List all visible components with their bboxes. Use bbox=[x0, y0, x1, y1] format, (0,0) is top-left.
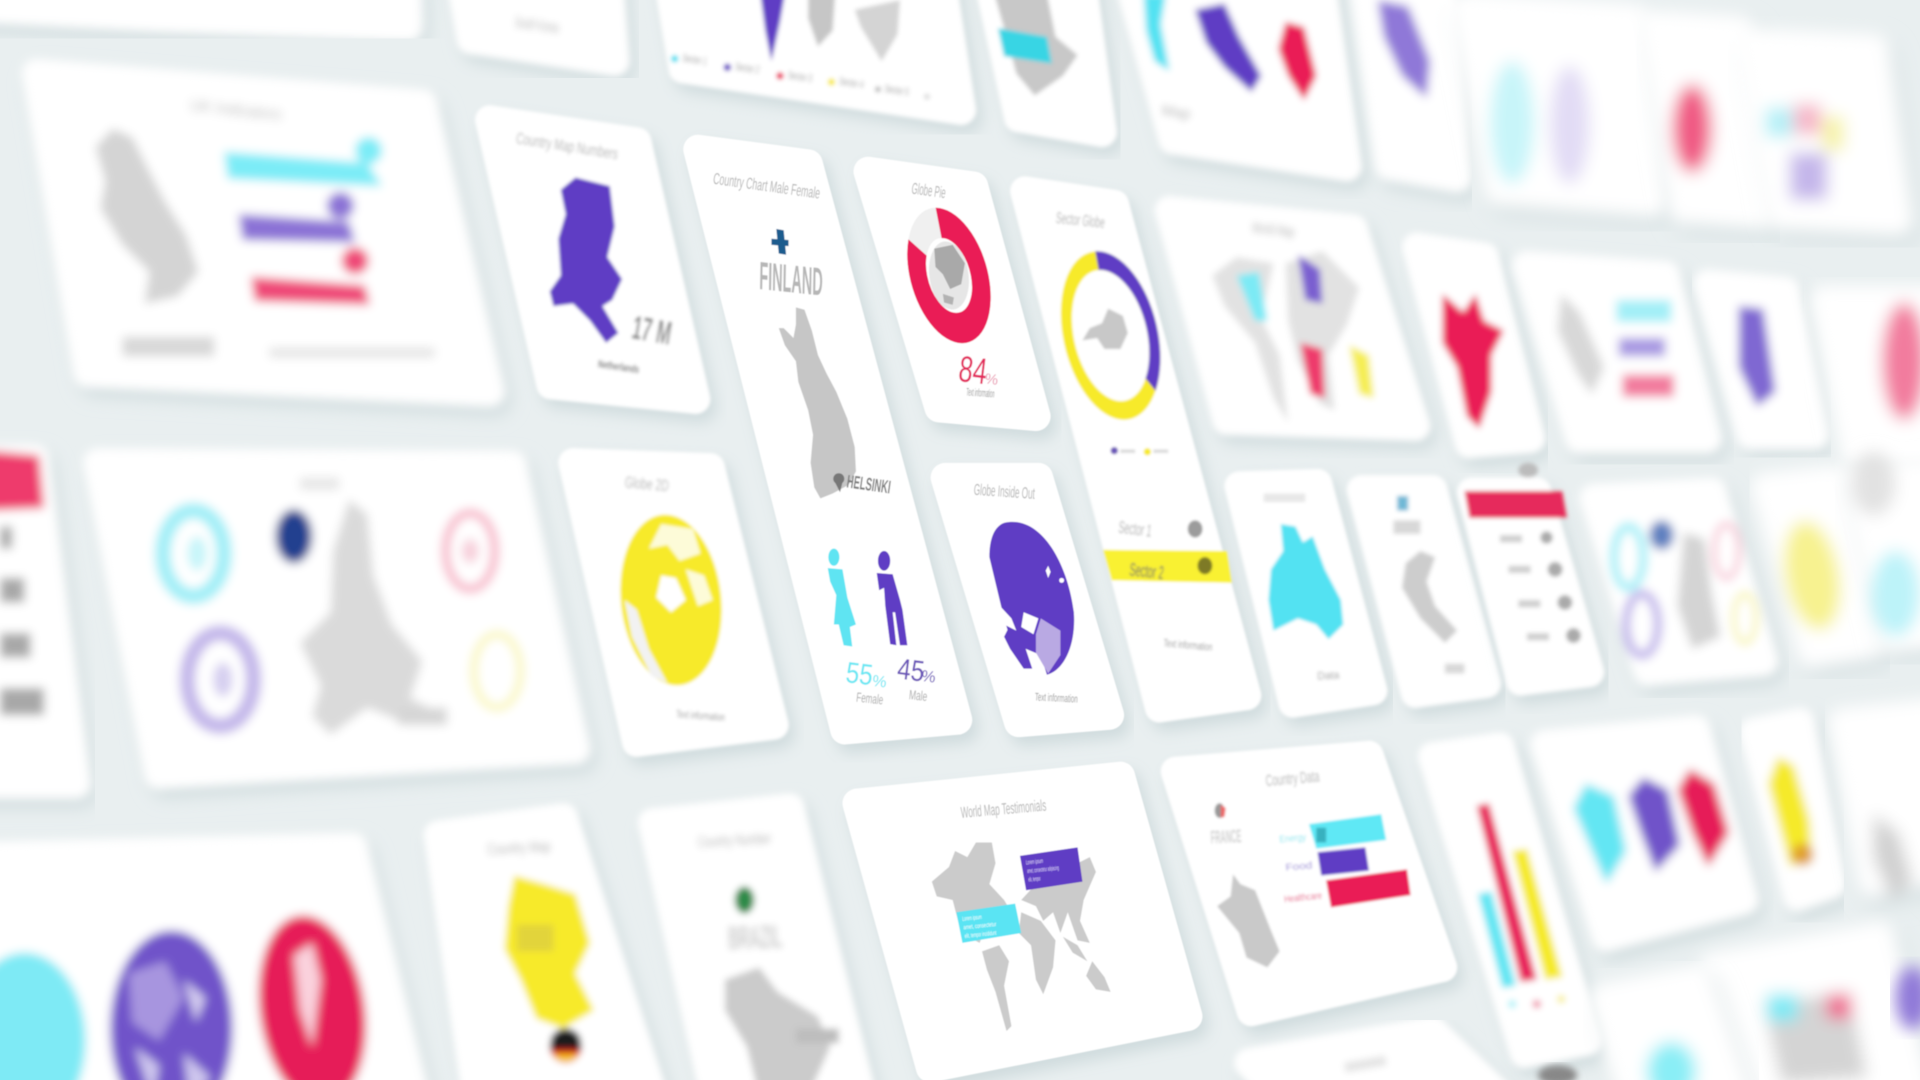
icon: purple globe fragment bbox=[760, 0, 785, 61]
row: red bar bbox=[1284, 869, 1411, 907]
region: cyan bbox=[1237, 272, 1267, 321]
panel: far right red card bbox=[1824, 300, 1920, 453]
panel: UK chart bbox=[37, 73, 490, 392]
map: France bbox=[1217, 874, 1280, 967]
icon: Finland flag cross bbox=[771, 229, 789, 255]
panel: top row purple map card bbox=[1359, 0, 1457, 178]
panel: yellow map right bbox=[1753, 722, 1832, 896]
icon: flag circle bbox=[550, 1029, 582, 1063]
chart: two sector ring bbox=[1054, 258, 1167, 413]
row: Sector 1: Sector 1 bbox=[1117, 517, 1153, 541]
icon: female figure bbox=[828, 549, 856, 647]
stat: 45%: 45 bbox=[895, 653, 926, 689]
icon: grey map fragment right bbox=[855, 0, 900, 61]
map: red country bbox=[1278, 22, 1316, 100]
row: Sector 1 bbox=[1117, 517, 1202, 541]
chart: rings bbox=[1614, 520, 1756, 655]
callout: cyan testimonial: Lorem ipsum bbox=[962, 914, 982, 923]
heading: World Map bbox=[1251, 220, 1295, 241]
icon: male figure bbox=[877, 551, 907, 645]
label: Netherlands bbox=[597, 358, 640, 376]
panel: Netherlands map bbox=[490, 120, 696, 399]
heading: Country Map Numbers bbox=[515, 130, 619, 163]
labels: Map bbox=[1160, 102, 1192, 123]
chart: yellow ring bbox=[474, 634, 520, 708]
chart: cyan ring bbox=[163, 511, 224, 596]
heading bbox=[1518, 463, 1538, 478]
map: red bbox=[1882, 302, 1920, 420]
heading: World Map Testimonials bbox=[960, 798, 1047, 822]
legend row: Sector 3 bbox=[787, 69, 813, 85]
icon: yellow globe bbox=[612, 510, 730, 690]
panel: bottom dark dot card bbox=[1538, 1065, 1577, 1080]
panel: World Map Testimonials bbox=[857, 776, 1188, 1068]
row: Sector 2 highlighted: Sector 2 bbox=[1129, 559, 1165, 583]
region: red bbox=[1300, 343, 1325, 398]
heading: Country Map bbox=[487, 838, 551, 859]
map: Brazil bbox=[725, 967, 830, 1080]
heading bbox=[300, 478, 339, 490]
callout: cyan tag bbox=[998, 28, 1052, 64]
map: cyan bbox=[1573, 784, 1626, 884]
panel: Australia map bbox=[1239, 484, 1373, 703]
heading: Globe 2D bbox=[624, 474, 670, 495]
heading bbox=[1344, 1056, 1387, 1073]
stat: 45%: % bbox=[920, 668, 936, 687]
label bbox=[1445, 664, 1464, 673]
bar: red bbox=[251, 247, 370, 305]
panel: world colour map bbox=[1169, 211, 1416, 426]
map: grey country bbox=[1082, 309, 1128, 349]
icon: purple globe bbox=[989, 522, 1074, 675]
label: Data bbox=[1317, 669, 1341, 683]
text block bbox=[269, 348, 435, 358]
panel: left edge table bbox=[0, 451, 76, 784]
panel: Germany map bbox=[438, 818, 655, 1080]
map: Netherlands bbox=[550, 178, 622, 343]
heading: Globe Inside Out bbox=[973, 482, 1036, 503]
bar: cyan bbox=[224, 137, 382, 186]
bar: cyan bbox=[1478, 891, 1516, 988]
chart: donut 84% bbox=[908, 223, 990, 328]
icon: cyan globe bbox=[0, 953, 86, 1080]
panel: bottom row small cards bbox=[1604, 980, 1739, 1080]
map: purple country bbox=[1195, 4, 1261, 92]
heading: Country Chart Male Female bbox=[712, 171, 821, 203]
bar: yellow bbox=[1512, 849, 1562, 980]
icon: flag bbox=[1397, 496, 1408, 511]
map: grey world bbox=[1212, 257, 1288, 422]
label: Text information bbox=[676, 709, 725, 724]
icon: France flag bbox=[1215, 803, 1226, 818]
panel: France bars: FRANCE bbox=[1210, 825, 1242, 848]
panel: top row left card bbox=[0, 0, 408, 27]
panel: table card bbox=[1464, 463, 1589, 681]
panel: top row small card bbox=[456, 0, 615, 61]
panel: right yellow map bbox=[1766, 480, 1873, 653]
map: Finland bbox=[779, 307, 856, 498]
legend dots bbox=[1509, 996, 1565, 1008]
heading: Sector Globe bbox=[1055, 210, 1106, 232]
map: pink country bbox=[1673, 84, 1712, 173]
map: yellow with orange tip bbox=[1768, 757, 1813, 867]
stat: 55%: 55 bbox=[844, 656, 875, 692]
callout: purple testimonial: Lorem ipsum bbox=[1026, 858, 1043, 866]
panel: top row far pink card bbox=[1653, 24, 1763, 214]
map: Germany bbox=[504, 876, 594, 1029]
panel: Brazil map: BRAZIL bbox=[728, 918, 783, 956]
panel: vertical bars bbox=[1433, 747, 1587, 1053]
map: grey with colours bbox=[1763, 992, 1867, 1080]
callout: cyan testimonial: amet, consectetur bbox=[963, 921, 997, 931]
chart: red ring bbox=[446, 513, 495, 589]
row: purple bar bbox=[1285, 847, 1369, 876]
panel: red map bbox=[1417, 247, 1531, 443]
map: world bbox=[932, 842, 1111, 1031]
panel: grey map with flag bbox=[1362, 490, 1487, 693]
panel: top row three maps card bbox=[1120, 0, 1347, 167]
stat: 17M: 17 M bbox=[629, 309, 674, 353]
map: cyan bbox=[1647, 1042, 1696, 1080]
table header bbox=[1464, 491, 1567, 518]
callout: purple testimonial: elit, tempor bbox=[1028, 875, 1041, 884]
panel: far right grey map bbox=[1843, 710, 1920, 900]
map: grey country bbox=[994, 0, 1078, 96]
icon: grey map fragment bbox=[808, 0, 835, 47]
heading: Country Number bbox=[697, 830, 772, 851]
label: Female: Female bbox=[856, 690, 884, 707]
legend row: Sector 2 bbox=[734, 61, 760, 77]
panel: top row far card bbox=[1463, 6, 1653, 202]
icon: red globe bbox=[247, 908, 378, 1080]
panel: far right purple fragment bbox=[1896, 966, 1920, 1030]
label: Text information bbox=[1035, 691, 1078, 706]
map: UK bbox=[96, 129, 198, 304]
labels bbox=[398, 708, 447, 725]
map: cyan country bbox=[1144, 0, 1169, 71]
row: Sector 2 highlighted bbox=[1103, 550, 1232, 583]
map: purple bbox=[1629, 778, 1680, 872]
legend row: Sector 1 bbox=[682, 52, 708, 68]
map: light purple country bbox=[1378, 0, 1430, 98]
legend row bbox=[671, 52, 930, 100]
label bbox=[796, 1029, 839, 1043]
panel: Finland male female chart bbox=[698, 149, 958, 730]
bar: purple bbox=[239, 192, 355, 242]
region: yellow bbox=[1349, 345, 1374, 398]
panel: bottom row card right bbox=[1714, 937, 1920, 1080]
legend row: Sector 5 bbox=[884, 83, 910, 99]
map: grey country bbox=[1402, 551, 1457, 643]
legend row: Sector 4 bbox=[838, 76, 864, 91]
chart: purple ring bbox=[187, 633, 253, 726]
panel: Globe Inside Out bbox=[945, 478, 1109, 722]
stat: 84%: 84 bbox=[957, 348, 990, 392]
panel: Finland male female chart: FINLAND bbox=[759, 254, 823, 305]
icon: grey globe bbox=[925, 239, 973, 312]
callout: purple testimonial bbox=[1020, 847, 1082, 890]
panel: far right cyan card bbox=[1851, 452, 1920, 637]
map: colour patches bbox=[1766, 104, 1844, 200]
panel: Globe Pie bbox=[868, 171, 1036, 416]
map: grey bbox=[1558, 294, 1604, 394]
table header bbox=[0, 451, 44, 511]
panel: France bars bbox=[1176, 756, 1442, 1011]
icon: Brazil flag circle bbox=[735, 887, 754, 913]
bar: red bbox=[1477, 803, 1537, 982]
row: cyan bar: Energy bbox=[1279, 832, 1307, 845]
heading: Globe Pie bbox=[910, 181, 947, 202]
map: grey bbox=[1873, 814, 1913, 900]
label: Text information bbox=[1163, 638, 1213, 654]
map: grey fragment bbox=[1851, 452, 1896, 516]
panel: Brazil map bbox=[653, 808, 863, 1080]
callout: cyan testimonial bbox=[956, 904, 1021, 943]
panel: three colour maps bbox=[1545, 730, 1744, 937]
map: faint cyan bbox=[1490, 61, 1534, 184]
icon: map pin bbox=[833, 473, 844, 492]
heading: Country Data bbox=[1265, 768, 1320, 790]
chart: dark blue dot bbox=[276, 509, 312, 563]
map: cyan bbox=[1871, 551, 1920, 637]
row: red bar: Healthcare bbox=[1284, 891, 1323, 905]
map: yellow bbox=[1776, 517, 1848, 634]
map: red bbox=[1678, 769, 1729, 867]
panel: purple map bbox=[1708, 284, 1815, 435]
icon: purple globe bbox=[110, 931, 233, 1080]
map: red country bbox=[1442, 294, 1504, 429]
callout: purple testimonial: amet, consectetur adipiscing bbox=[1027, 865, 1059, 875]
map: purple bbox=[1739, 306, 1776, 407]
panel: top row globe legend card bbox=[664, 0, 961, 110]
label: country bbox=[122, 337, 214, 356]
map: faint purple bbox=[1550, 66, 1589, 184]
callout: cyan testimonial: elit, tempor incididunt bbox=[964, 930, 997, 940]
panel: Europe rings bbox=[98, 463, 576, 774]
row: purple bar: Food bbox=[1285, 860, 1313, 874]
table rows bbox=[1500, 531, 1581, 643]
panel: top row small card: South Korea bbox=[514, 14, 560, 37]
panel: top row country callout card bbox=[982, 0, 1102, 132]
panel: bottom left globes bbox=[0, 847, 416, 1080]
panel: top row far colour card bbox=[1751, 43, 1898, 220]
map: Australia bbox=[1269, 524, 1343, 639]
panel: map with bars bbox=[1527, 266, 1707, 438]
heading bbox=[1393, 520, 1420, 534]
label: Male: Male bbox=[908, 687, 928, 704]
stat: 84%: % bbox=[984, 371, 999, 389]
heading: UK Indicators bbox=[189, 97, 283, 124]
panel: Donut sectors bbox=[1025, 191, 1247, 708]
bars bbox=[1616, 300, 1674, 397]
legend bbox=[1111, 447, 1168, 456]
label: Helsinki: HELSINKI bbox=[846, 471, 892, 497]
heading bbox=[1264, 493, 1305, 502]
map: Europe bbox=[300, 500, 447, 735]
table rows bbox=[0, 527, 44, 715]
row: cyan bar bbox=[1279, 814, 1386, 849]
panel: right rings Europe bbox=[1594, 492, 1763, 671]
stat: 55%: % bbox=[871, 673, 887, 691]
panel: Globe Pie: Text information bbox=[966, 387, 995, 400]
panel: yellow globe bbox=[573, 463, 774, 742]
panel: bottom map fragment bbox=[1249, 1031, 1506, 1080]
region: purple bbox=[1298, 255, 1322, 304]
stat bbox=[517, 924, 553, 951]
